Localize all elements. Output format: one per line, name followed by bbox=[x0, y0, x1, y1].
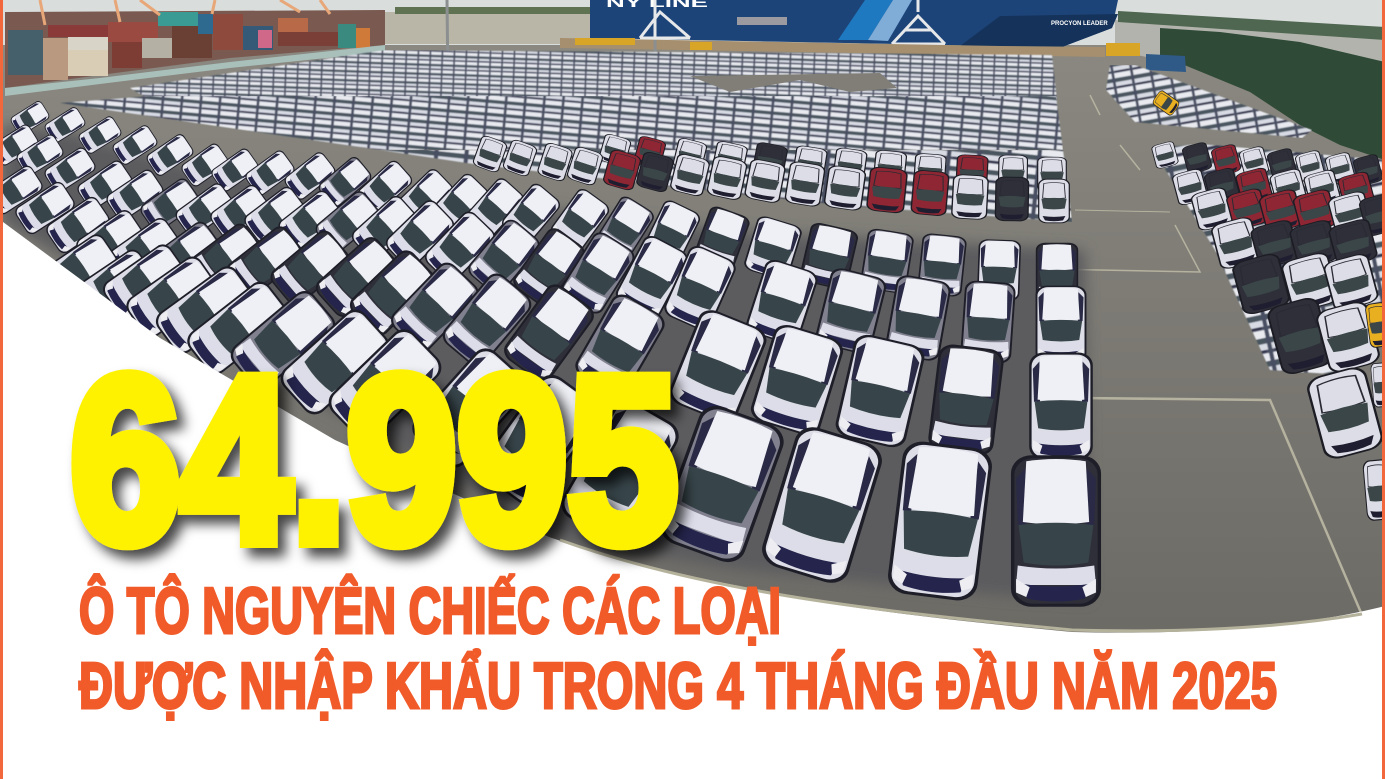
river right bbox=[1115, 20, 1385, 70]
river left bbox=[385, 12, 590, 44]
upper car block far bbox=[130, 50, 1057, 100]
port cranes bbox=[40, 0, 330, 25]
container stacks bbox=[5, 10, 385, 96]
curb stripe along curve bbox=[560, 540, 1362, 631]
yellow car bbox=[1151, 89, 1181, 117]
poles bbox=[447, 0, 656, 90]
dark ground under lower cars bbox=[3, 125, 1090, 600]
asphalt ground bbox=[0, 45, 1385, 645]
lower-left car rows bbox=[0, 99, 1101, 607]
quay gantries bbox=[640, 0, 945, 44]
upper block front cars bbox=[472, 133, 1070, 223]
right car block background bbox=[1152, 144, 1385, 375]
left orange border bbox=[0, 0, 3, 779]
parking lines bbox=[1000, 95, 1362, 615]
yellow dock machinery bbox=[575, 38, 1140, 56]
tree line right bbox=[1118, 11, 1385, 40]
tree line left bbox=[395, 7, 590, 14]
upper car block middle bbox=[60, 96, 1063, 150]
gap in upper block bbox=[690, 73, 897, 92]
ship hull: PROCYON LEADER bbox=[1051, 21, 1108, 27]
quay edge bbox=[560, 38, 1105, 57]
heading line 1: Ô TÔ NGUYÊN CHIẾC CÁC LOẠI bbox=[79, 574, 781, 647]
white curved panel bbox=[0, 218, 1385, 779]
right car block bbox=[1151, 140, 1385, 521]
right top car block bbox=[1106, 65, 1312, 138]
big number: 64.995 bbox=[70, 328, 678, 592]
upper car block near bbox=[380, 150, 1072, 222]
blue tent bbox=[1146, 54, 1186, 72]
right orange border bbox=[1382, 0, 1385, 779]
trees bbox=[1160, 28, 1385, 160]
ship hull bbox=[590, 0, 1118, 47]
sky bbox=[0, 0, 1385, 60]
